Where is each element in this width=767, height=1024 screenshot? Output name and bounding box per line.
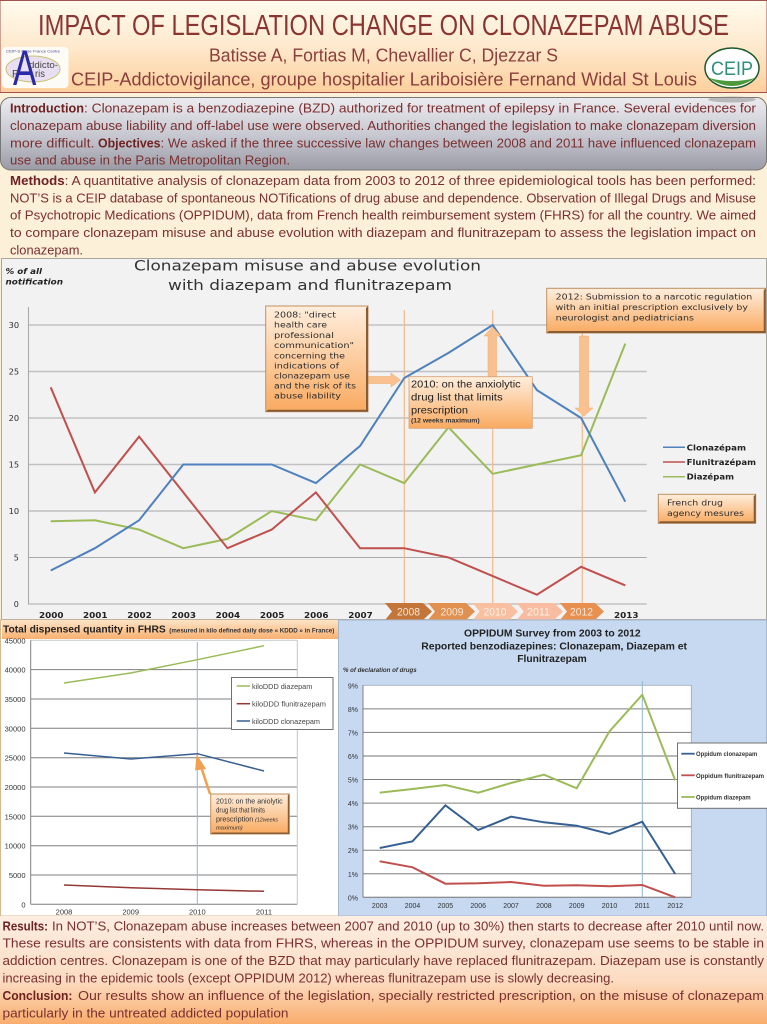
y axis labels: 30	[9, 321, 19, 330]
y axis labels: 5	[14, 554, 19, 562]
timeline chevrons 2008 to 2012: 2011	[527, 607, 550, 619]
OPPIDUM y axis labels: 8%	[348, 707, 358, 714]
OPPIDUM heading: OPPIDUM Survey from 2003 to 2012	[464, 629, 641, 640]
2011 marker line	[641, 681, 643, 897]
line: flunitrazepam	[51, 387, 625, 595]
callout: 2010 limit on prescription	[211, 794, 289, 834]
FHRS y axis labels: 25000	[5, 754, 26, 763]
x axis labels: 2001	[83, 611, 108, 620]
FHRS grid and axes	[31, 640, 297, 904]
panel: introduction and objectives: Introduction	[10, 101, 84, 116]
OPPIDUM x axis labels: 2004	[405, 903, 420, 910]
icon: Addicto-Paris logo: ris	[35, 69, 45, 80]
results text: increasing in the epidemic tools (except OPPIDUM 2012) whereas flunitrazepam use is slowly decreasing.	[2, 970, 614, 985]
OPPIDUM y axis labels: 6%	[348, 754, 358, 761]
OPPIDUM x axis labels: 2007	[503, 903, 519, 910]
icon: Addicto-Paris logo: P	[12, 69, 19, 80]
results text: These results are consistents with data from FHRS, whereas in the OPPIDUM survey, clonazepam use seems to be stable in	[2, 936, 764, 951]
x axis labels: 2003	[172, 611, 196, 620]
FHRS heading: (mesured in kilo defined daily dose « KDDD » in France)	[169, 628, 334, 634]
legend: Clonazépam	[687, 442, 746, 452]
panel: main line chart, misuse and abuse evolution	[2, 258, 766, 620]
panel: methods: clonazepam.	[10, 242, 83, 257]
callout: 2008 communication	[266, 306, 368, 412]
callout: 2008 communication: professional	[274, 331, 334, 340]
panel: methods: NOT’S is a CEIP database of spontaneous NOTifications of drug abuse and dependence. Observation of Illegal Drugs and Misuse	[10, 190, 756, 205]
panel: methods: : A quantitative analysis of clonazepam data from 2003 to 2012 of three epidemiological tools has been performed:	[65, 173, 756, 188]
icon: CEIP logo	[705, 48, 759, 88]
panel: introduction and objectives: : We asked if the three successive law changes between 2008 and 2011 have influenced clonazepam	[160, 135, 756, 150]
line: Oppidum diazepam	[380, 695, 675, 793]
FHRS y axis labels: 35000	[5, 695, 26, 704]
OPPIDUM y axis labels: 2%	[348, 848, 358, 855]
FHRS y axis labels: 15000	[5, 812, 26, 821]
callout: 2010 anxiolytic list	[409, 377, 532, 428]
callout: 2008 communication: clonazepam use	[274, 372, 350, 381]
callout: 2008 communication: 2008: "direct	[274, 311, 336, 320]
arrow: callout to 2010	[196, 758, 210, 794]
callout: 2010 anxiolytic list: (12 weeks maximum)	[411, 418, 480, 425]
panel: introduction and objectives: more difficult.	[10, 135, 94, 150]
panel: introduction and objectives: use and abuse in the Paris Metropolitan Region.	[10, 152, 290, 168]
affiliation: CEIP-Addictovigilance, groupe hospitalier Lariboisière Fernand Widal St Louis	[71, 68, 697, 90]
y axis title: % of all	[6, 267, 42, 276]
OPPIDUM heading: Reported benzodiazepines: Clonazepam, Diazepam et	[421, 642, 688, 653]
FHRS y axis labels: 20000	[5, 783, 26, 792]
FHRS x axis labels: 2010	[189, 908, 206, 916]
x axis labels: 2005	[260, 611, 285, 620]
legend	[663, 442, 756, 482]
OPPIDUM x axis labels: 2009	[569, 903, 585, 910]
OPPIDUM heading: Flunitrazepam	[517, 654, 587, 665]
conclusion text: Our results show an influence of the legislation, specially restricted prescription, on the misuse of clonazepam	[78, 988, 764, 1003]
panel: methods: of Psychotropic Medications (OPPIDUM), data from French health reimbursement system (FHRS) for all the country. We aimed	[10, 208, 756, 223]
x axis labels: 2006	[304, 611, 329, 620]
results text: In NOT’S, Clonazepam abuse increases between 2007 and 2010 (up to 30%) then starts to decrease after 2010 until now.	[52, 919, 764, 934]
line: diazepam	[51, 344, 625, 548]
line: Oppidum flunitrazepam	[380, 861, 675, 897]
FHRS heading	[2, 620, 338, 639]
line: clonazepam	[51, 325, 625, 570]
callout: 2010 limit on prescription: maximum)	[216, 826, 243, 832]
line: Oppidum clonazepam	[380, 805, 675, 874]
icon: Addicto-Paris logo: ddicto-	[29, 60, 58, 70]
FHRS x axis labels	[56, 908, 272, 916]
y axis labels: 10	[9, 507, 19, 516]
OPPIDUM heading	[421, 629, 688, 665]
chart title: Clonazepam misuse and abuse evolution	[134, 259, 481, 275]
OPPIDUM x axis labels	[372, 903, 683, 910]
FHRS legend: kiloDDD flunitrazepam	[252, 700, 326, 709]
y axis labels: 25	[9, 368, 19, 376]
grid lines and axes	[28, 307, 647, 604]
chart title	[134, 259, 481, 294]
panel: FHRS dispensed quantity chart	[0, 620, 338, 916]
FHRS y axis labels	[5, 636, 26, 909]
OPPIDUM y axis labels: 5%	[348, 778, 358, 784]
FHRS y axis labels: 10000	[5, 842, 26, 851]
x axis labels: 2007	[348, 611, 373, 620]
conclusion text	[2, 988, 764, 1021]
OPPIDUM y axis labels: 3%	[348, 825, 358, 832]
x axis labels: 2004	[216, 611, 241, 620]
y axis labels: 0	[14, 600, 19, 609]
callout: 2010 limit on prescription: drug list that limits	[216, 808, 265, 815]
FHRS y axis labels: 45000	[5, 636, 26, 645]
OPPIDUM y axis title: % of declaration of drugs	[343, 667, 417, 674]
icon: Addicto-Paris logo	[2, 41, 68, 97]
legend box: French drug agency measures: agency mesures	[667, 509, 744, 518]
panel: methods: to compare clonazepam misuse and abuse evolution with diazepam and flunitrazepam to assess the legislation impact on	[10, 225, 756, 240]
panel: introduction and objectives: Objectives	[98, 135, 160, 150]
OPPIDUM y axis labels: 1%	[348, 872, 358, 879]
FHRS legend	[232, 678, 333, 730]
legend: Diazépam	[687, 472, 734, 482]
x axis labels: 2013	[614, 611, 638, 620]
OPPIDUM y axis labels: 4%	[348, 801, 358, 808]
FHRS y axis labels: 5000	[9, 871, 26, 880]
arrow: 2010 up	[484, 327, 501, 377]
panel: methods	[0, 171, 767, 258]
timeline chevrons 2008 to 2012	[385, 603, 604, 620]
callout: 2008 communication: health care	[274, 321, 327, 330]
arrow: 2008 to curve	[368, 373, 400, 387]
line: kiloDDD clonazepam	[64, 753, 264, 771]
OPPIDUM y axis labels: 0%	[348, 895, 358, 902]
OPPIDUM legend	[678, 743, 767, 808]
FHRS legend: kiloDDD clonazepam	[252, 717, 320, 726]
FHRS y axis labels: 30000	[5, 724, 26, 733]
timeline chevrons 2008 to 2012: 2010	[484, 607, 506, 619]
authors: Batisse A, Fortias M, Chevallier C, Djezzar S	[209, 44, 558, 66]
panel: OPPIDUM survey chart	[338, 620, 767, 916]
OPPIDUM x axis labels: 2010	[602, 903, 617, 910]
timeline chevrons 2008 to 2012: 2009	[440, 607, 464, 619]
FHRS x axis labels: 2009	[122, 908, 139, 916]
chart title: with diazepam and flunitrazepam	[168, 278, 452, 294]
y axis labels	[9, 321, 19, 609]
callout: 2010 limit on prescription: (12weeks	[255, 818, 278, 824]
timeline chevrons 2008 to 2012: 2008	[397, 607, 420, 619]
OPPIDUM x axis labels: 2003	[372, 903, 388, 910]
OPPIDUM x axis labels: 2012	[667, 903, 683, 910]
callout: 2012 narcotic regulation: 2012: Submission to a narcotic regulation	[556, 293, 752, 302]
y axis title	[6, 267, 63, 286]
panel: introduction and objectives: clonazepam abuse liability and off-label use were observed. Authorities changed the legislation to make clonazepam diversion	[10, 118, 756, 133]
callout: 2008 communication: concerning the	[274, 351, 345, 360]
FHRS heading: Total dispensed quantity in FHRS	[3, 624, 166, 636]
arrow: 2012 down	[575, 336, 593, 416]
callout: 2008 communication: communication"	[274, 341, 354, 350]
results text	[2, 919, 764, 985]
callout: 2010 anxiolytic list: prescription	[411, 405, 468, 417]
OPPIDUM x axis labels: 2006	[470, 903, 486, 910]
OPPIDUM x axis labels: 2008	[536, 903, 552, 910]
timeline chevrons 2008 to 2012: 2012	[570, 607, 593, 619]
panel: introduction and objectives	[0, 96, 766, 170]
OPPIDUM legend: Oppidum diazepam	[696, 794, 751, 802]
panel: results and conclusion	[0, 916, 767, 1024]
FHRS x axis labels: 2008	[56, 908, 72, 916]
y axis title: notification	[6, 278, 63, 286]
callout: 2010 anxiolytic list: 2010: on the anxiolytic	[411, 379, 521, 391]
callout: 2012 narcotic regulation: with an initial prescription exclusively by	[556, 303, 748, 312]
OPPIDUM x axis labels: 2005	[438, 903, 453, 910]
callout: 2008 communication: abuse liability	[274, 392, 341, 401]
OPPIDUM legend: Oppidum clonazepam	[696, 751, 757, 758]
panel: methods: Methods	[10, 173, 65, 188]
OPPIDUM y axis labels: 7%	[348, 730, 358, 737]
FHRS y axis labels: 0	[21, 900, 26, 909]
legend box: French drug agency measures: French drug	[667, 499, 723, 508]
agency measure marker lines	[404, 310, 582, 604]
callout: 2010 limit on prescription: prescription	[216, 817, 253, 824]
callout: 2008 communication: and the risk of its	[274, 382, 356, 391]
x axis labels: 2000	[39, 611, 64, 620]
callout: 2012 narcotic regulation: neurologist and pediatricians	[556, 313, 694, 322]
conclusion text: particularly in the untreated addicted population	[2, 1006, 288, 1021]
OPPIDUM x axis labels: 2011	[635, 903, 650, 910]
callout: 2010 anxiolytic list: drug list that limits	[411, 392, 503, 404]
results text: Results:	[2, 919, 48, 934]
y axis labels: 20	[9, 414, 19, 423]
line: kiloDDD flunitrazepam	[64, 885, 264, 891]
icon: CEIP logo: CEIP	[711, 59, 753, 80]
x axis labels: 2002	[127, 611, 152, 620]
FHRS y axis labels: 40000	[5, 666, 26, 675]
legend: Flunitrazépam	[687, 457, 756, 467]
callout: 2008 communication: indications of	[274, 361, 339, 370]
FHRS legend: kiloDDD diazepam	[252, 682, 312, 691]
results text: addiction centres. Clonazepam is one of the BZD that may particularly have replaced flunitrazepam. Diazepam use is constantly	[2, 953, 764, 968]
OPPIDUM y axis labels	[348, 683, 358, 902]
OPPIDUM plot area with grid	[363, 685, 691, 897]
icon: Addicto-Paris logo: A	[13, 41, 37, 97]
line: kiloDDD diazepam	[64, 646, 264, 683]
icon: Addicto-Paris logo: CEIP-S Ile de France Centre	[6, 50, 60, 54]
callout: 2012 narcotic regulation	[547, 288, 766, 333]
header banner	[0, 0, 767, 97]
2010 marker line	[196, 642, 198, 904]
OPPIDUM legend: Oppidum flunitrazepam	[696, 773, 764, 780]
FHRS x axis labels: 2011	[256, 908, 272, 916]
callout: 2010 limit on prescription: 2010: on the aniolytic	[216, 798, 283, 805]
conclusion text: Conclusion:	[2, 988, 72, 1003]
y axis labels: 15	[9, 460, 19, 470]
OPPIDUM y axis labels: 9%	[348, 683, 358, 690]
x axis labels	[39, 611, 638, 620]
legend box: French drug agency measures	[658, 494, 756, 523]
panel: introduction and objectives: : Clonazepam is a benzodiazepine (BZD) authorized for treatment of epilepsy in France. Several evidences for	[84, 101, 757, 116]
